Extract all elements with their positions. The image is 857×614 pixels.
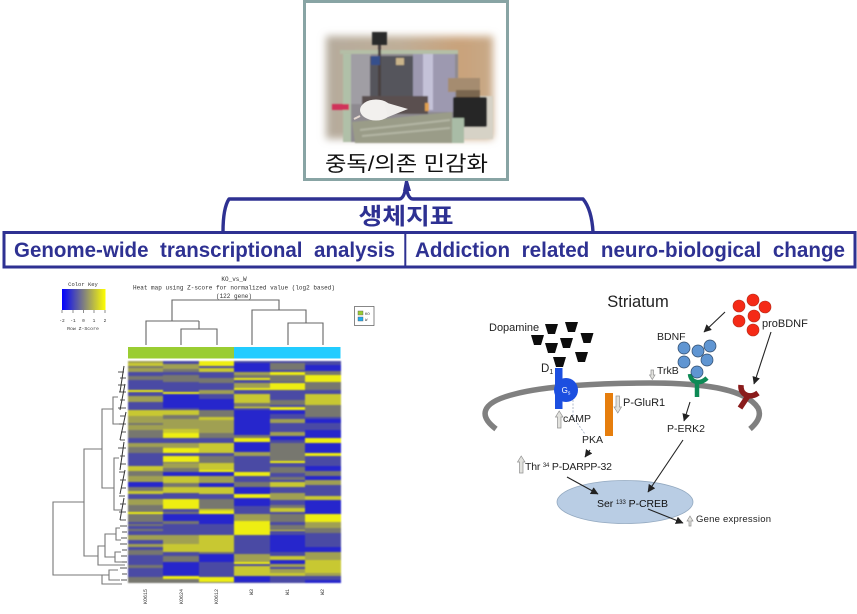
panel: striatum pathway diagram (485, 293, 808, 526)
pathway labels: TrkB (657, 365, 679, 377)
label: genome-wide: Genome-wide transcriptional analysis (14, 239, 395, 262)
pathway labels: P-GluR1 (623, 397, 665, 409)
pathway labels: proBDNF (762, 318, 808, 330)
pathway labels: BDNF (657, 331, 686, 343)
sample labels: W3 (249, 589, 255, 595)
panel: two analysis labels (4, 232, 855, 267)
sample labels: W2 (320, 589, 326, 595)
nucleus ellipse (557, 480, 693, 524)
label: gene expression: Gene expression (696, 514, 771, 525)
hollow change arrows (518, 370, 693, 526)
color key legend: -2 (59, 318, 65, 324)
label: P-CREB: 133 (616, 500, 627, 506)
sample labels (143, 589, 326, 604)
Gs protein: G (562, 386, 568, 395)
pathway labels: 34 (543, 463, 550, 469)
color key legend: 1 (93, 318, 96, 324)
chart title: KO_vs_W (221, 276, 247, 283)
sample labels: KO624 (179, 589, 185, 604)
color key legend: Color Key (68, 281, 99, 288)
label: P-CREB: Ser (597, 498, 613, 510)
orange P-GluR1 bar (605, 393, 613, 436)
Gs protein (554, 378, 578, 402)
Gs protein: s (568, 390, 571, 396)
sample labels: W1 (285, 589, 291, 595)
chart title: (122 gene) (216, 293, 252, 300)
sample legend (354, 306, 374, 326)
panel: addiction sensitization photo (304, 2, 508, 180)
photo: rat in test chamber (326, 32, 493, 143)
row dendrogram (53, 366, 127, 584)
pathway labels: P-DARPP-32 (549, 461, 612, 473)
D1 receptor bar (555, 368, 562, 409)
pathway labels (525, 318, 808, 473)
label: D1: 1 (549, 369, 553, 376)
dashed signal path (573, 400, 585, 434)
color key legend: 2 (104, 318, 107, 324)
column dendrogram (146, 300, 323, 345)
color key legend: Row Z-Score (67, 326, 99, 332)
label: D1: D (541, 363, 549, 375)
label: dopamine: Dopamine (489, 322, 539, 334)
signal arrows (567, 312, 771, 523)
sample legend: KO (365, 313, 370, 317)
BDNF particles (678, 340, 716, 368)
proBDNF receptor (740, 385, 758, 408)
pathway labels: cAMP (563, 413, 591, 425)
label: neuro-biological: Addiction related neuro-biological change (415, 239, 845, 262)
heading: biomarkers: 생체지표 (358, 203, 454, 229)
color key legend (59, 281, 107, 332)
proBDNF particles (733, 294, 771, 336)
dopamine molecules (531, 322, 594, 367)
sample labels: KO615 (143, 589, 149, 604)
pathway labels: P-ERK2 (667, 423, 705, 435)
pathway labels: Thr (525, 461, 540, 473)
pathway labels: PKA (582, 434, 603, 446)
chart title: Heat map using Z-score for normalized value (log2 based) (133, 284, 335, 292)
TrkB receptor (690, 374, 707, 397)
color key legend: 0 (82, 318, 85, 324)
label: P-CREB: P-CREB (626, 498, 668, 510)
rat (354, 100, 408, 120)
color key legend: -1 (70, 318, 76, 324)
heat map matrix (127, 360, 342, 584)
cell membrane (485, 383, 759, 429)
bracket connector with arrow (223, 181, 593, 232)
sample labels: KO612 (214, 589, 220, 604)
photo caption: 중독/의존 민감화 (325, 153, 488, 176)
group colour bars (128, 347, 340, 358)
sample legend: W (365, 319, 368, 323)
bound BDNF particle (691, 366, 703, 378)
chart title (133, 276, 335, 300)
pathway title: Striatum (607, 293, 669, 311)
